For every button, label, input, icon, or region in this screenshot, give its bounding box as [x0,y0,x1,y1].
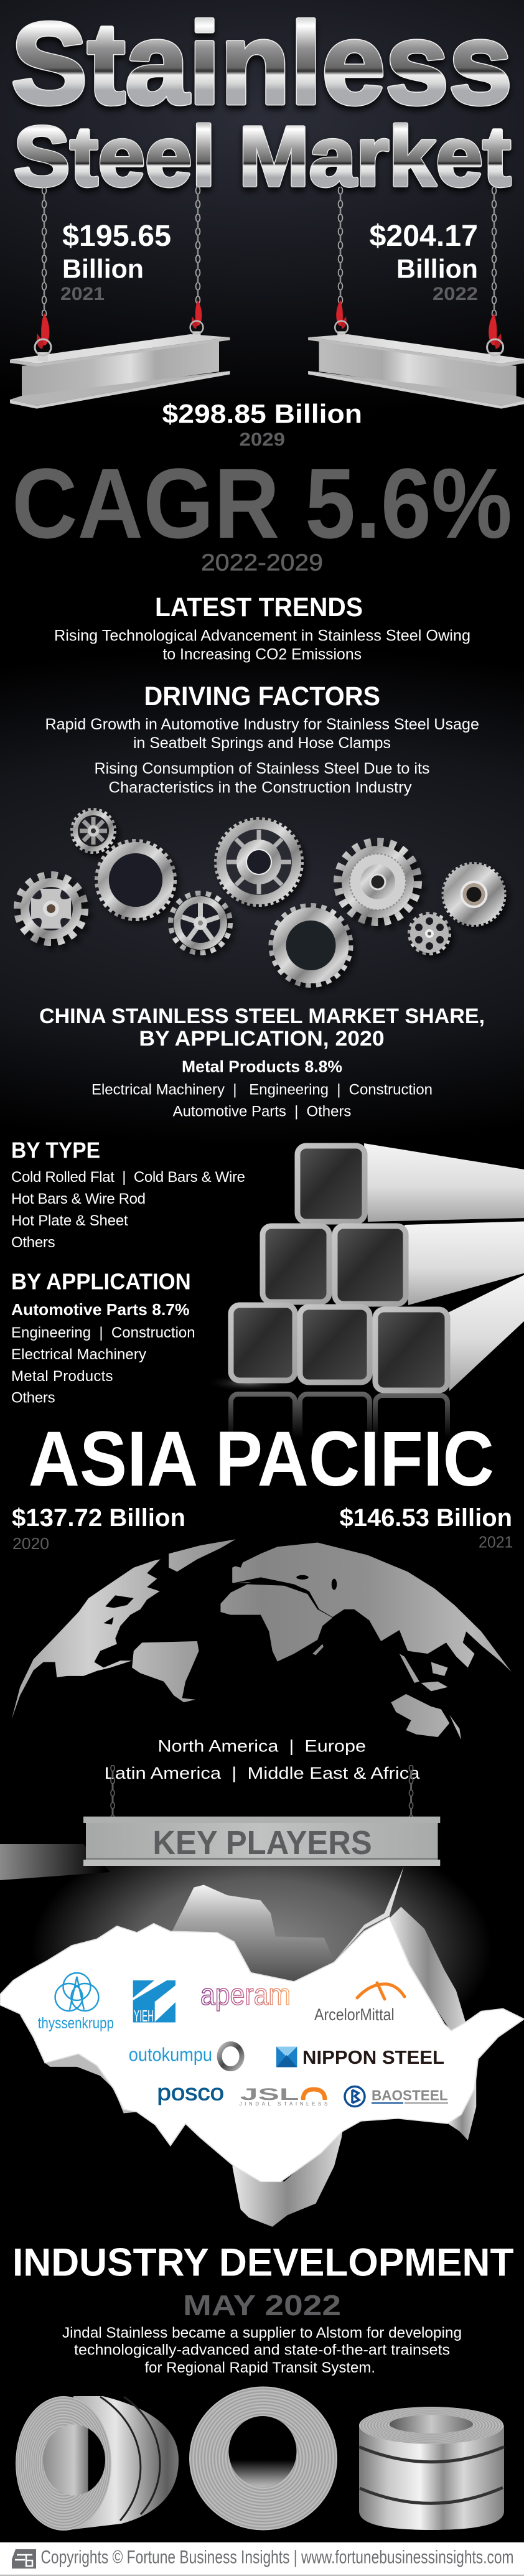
logo: thyssenkrupp: thyssenkrupp [38,2015,114,2032]
by type: Hot Plate & Sheet [11,1212,128,1229]
by application [11,1268,195,1407]
gears illustration [17,809,505,985]
latest trends: LATEST TRENDS [155,592,363,622]
title [11,0,512,204]
light wedge [0,1844,110,1880]
by type: BY TYPE [11,1137,100,1163]
gear big center [215,819,302,905]
steel coil left [16,2396,179,2531]
driving factors: Rapid Growth in Automotive Industry for Stainless Steel Usage [45,716,479,733]
gear left spokes [17,875,85,942]
driving factors [45,681,479,797]
china market share heading: Metal Products 8.8% [182,1057,342,1075]
logo: Nippon Steel: NIPPON STEEL [302,2046,444,2068]
china market share heading: Electrical Machinery | Engineering | Construction [91,1082,433,1098]
china market share heading [39,1005,485,1120]
world map [12,1539,512,1740]
steel coil right [359,2407,504,2530]
logo: JSL Jindal Stainless: JINDAL STAINLESS [239,2101,327,2107]
industry development [12,2241,514,2376]
footer bar [0,2542,524,2576]
logo: Baosteel [345,2086,448,2106]
asia pacific heading: $137.72 Billion [12,1504,185,1532]
torn flaps [45,1867,476,2227]
value 2022: 2022 [433,284,478,304]
industry development: MAY 2022 [183,2289,341,2321]
industry development: INDUSTRY DEVELOPMENT [12,2241,514,2284]
key players beam [83,1765,440,1866]
steel tubes illustration [205,1143,524,1464]
china market share heading: CHINA STAINLESS STEEL MARKET SHARE, [39,1005,485,1028]
driving factors: in Seatbelt Springs and Hose Clamps [133,734,391,752]
by application: Others [11,1389,55,1407]
by application: Metal Products [11,1368,113,1385]
asia pacific heading: 2021 [479,1533,513,1552]
driving factors: Characteristics in the Construction Industry [108,779,412,797]
logo: outokumpu: outokumpu [129,2044,212,2066]
value 2021: 2021 [60,284,105,304]
spotlight [31,1824,492,2073]
torn steel sheet [0,1867,524,2227]
logo: JSL Jindal Stainless [239,2085,327,2107]
value 2029: 2029 [239,429,285,450]
value 2021: $195.65 [62,220,171,253]
title: Steel Market [14,109,511,204]
asia pacific heading: ASIA PACIFIC [29,1416,494,1502]
other regions [105,1736,421,1782]
gear ring bottom [271,906,350,985]
industry development: technologically-advanced and state-of-the-art trainsets [74,2342,450,2359]
logo: thyssenkrupp [38,1973,114,2032]
logo: JSL Jindal Stainless: JSL [240,2085,299,2104]
logo: posco: posco [157,2080,224,2105]
asia pacific heading: $146.53 Billion [340,1504,512,1532]
value 2021: Billion [62,255,144,284]
gear small perforated [409,914,449,953]
china market share heading: BY APPLICATION, 2020 [139,1027,385,1051]
logo: ArcelorMittal [314,1983,405,2024]
by type [11,1137,245,1251]
steel coil center [189,2386,337,2531]
by application: Electrical Machinery [11,1346,146,1363]
value 2029 [162,400,362,450]
by application: Automotive Parts 8.7% [11,1300,189,1319]
value 2021 [60,220,171,304]
left hanging beam with chains [10,187,230,409]
by type: Others [11,1234,55,1251]
value 2022: Billion [396,255,478,284]
driving factors: Rising Consumption of Stainless Steel Due to its [95,760,429,777]
china market share heading: Automotive Parts | Others [173,1103,351,1120]
logo: Baosteel: BAOSTEEL [372,2087,448,2104]
by application: Engineering | Construction [11,1324,195,1341]
logo: YIEH: YIEH [134,2007,154,2025]
driving factors: DRIVING FACTORS [144,681,380,711]
tube reflection [231,1394,447,1464]
gear large ring [96,841,175,919]
title: Steel Market [14,109,511,204]
by application: BY APPLICATION [11,1268,191,1295]
asia pacific heading [12,1416,513,1553]
gear small top [72,809,115,853]
key players label: KEY PLAYERS [152,1824,372,1862]
value 2022 [370,220,478,304]
logo: ArcelorMittal: ArcelorMittal [314,2005,395,2024]
other regions: Latin America | Middle East & Africa [105,1764,421,1782]
industry development: for Regional Rapid Transit System. [144,2359,375,2376]
latest trends: to Increasing CO2 Emissions [163,645,362,663]
value 2022: $204.17 [370,220,478,253]
by type: Cold Rolled Flat | Cold Bars & Wire [11,1169,245,1186]
logo: aperam: aperam [200,1979,291,2012]
title: Stainless [11,0,512,128]
by type: Hot Bars & Wire Rod [11,1191,146,1207]
logo: YIEH [133,1980,175,2025]
industry development: Jindal Stainless became a supplier to Alstom for developing [62,2325,462,2341]
asia pacific heading: 2020 [12,1534,49,1553]
footer logo [12,2549,36,2569]
latest trends [54,592,470,663]
other regions: North America | Europe [158,1736,366,1755]
CAGR: 2022-2029 [201,550,323,576]
gear right [443,863,505,925]
gear right coarse [337,841,418,922]
gear small spokes [171,893,230,953]
latest trends: Rising Technological Advancement in Stainless Steel Owing [54,627,470,644]
value 2029: $298.85 Billion [162,400,362,429]
title: Stainless [11,0,512,128]
right hanging beam with chains [308,187,524,409]
